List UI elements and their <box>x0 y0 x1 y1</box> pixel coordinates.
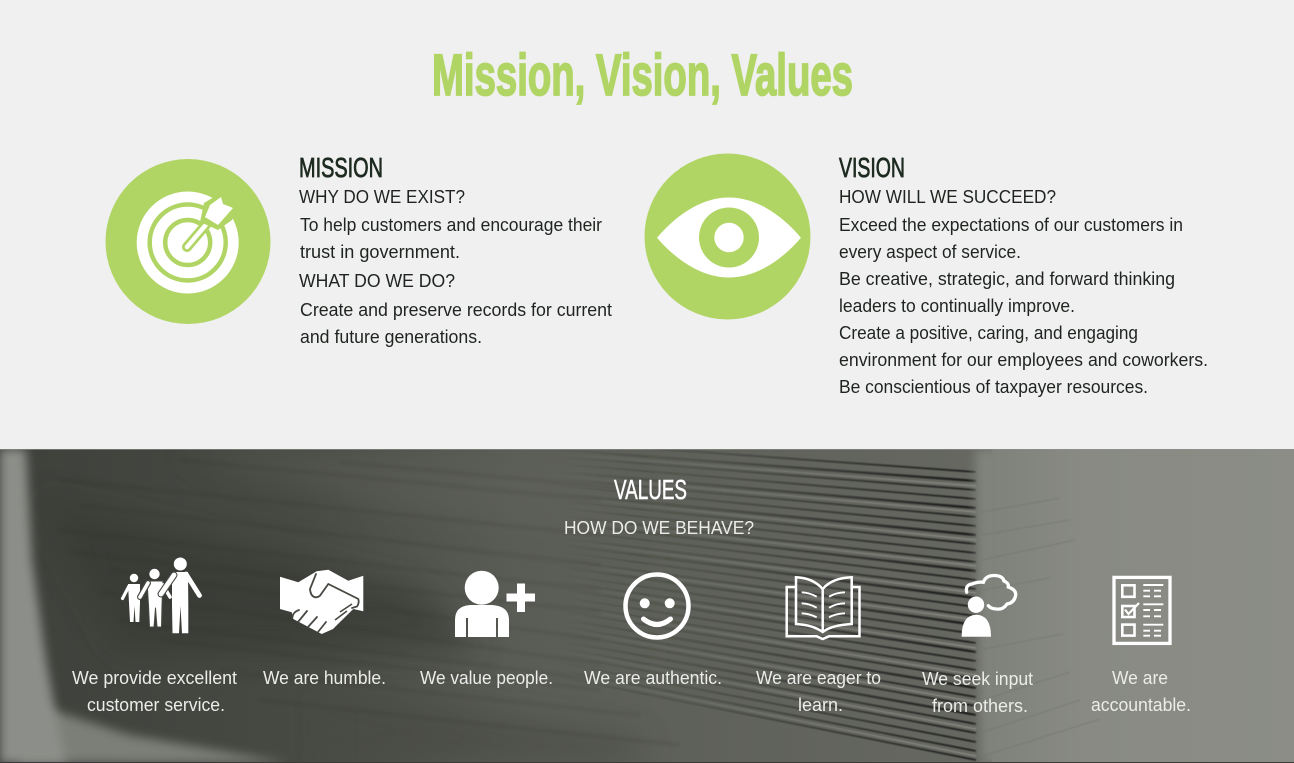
vision answers: environment for our employees and coworkers. <box>839 350 1208 370</box>
mission answer 2: Create and preserve records for current <box>300 300 612 320</box>
title: Mission, Vision, Values <box>432 43 853 108</box>
mission heading: MISSION <box>299 152 383 183</box>
vision question: HOW WILL WE SUCCEED? <box>839 187 1056 207</box>
vision answers: Create a positive, caring, and engaging <box>839 323 1138 343</box>
icon: family <box>122 558 200 633</box>
icon: person with plus <box>455 571 535 637</box>
mission answer 1: To help customers and encourage their <box>300 215 602 235</box>
icon: person thinking <box>962 575 1016 637</box>
mission question 1: WHY DO WE EXIST? <box>299 187 465 207</box>
icon: open book <box>787 577 860 639</box>
caption: seek input <box>922 669 1033 716</box>
caption: accountable: We are <box>1112 668 1168 688</box>
vision answers: every aspect of service. <box>839 242 1021 262</box>
icon: handshake <box>280 570 363 634</box>
caption: value people: We value people. <box>420 668 553 688</box>
vision answers: Be creative, strategic, and forward thinking <box>839 269 1175 289</box>
vision answers: Be conscientious of taxpayer resources. <box>839 377 1148 397</box>
vision answers <box>839 215 1208 397</box>
mission answer 1 <box>300 215 602 262</box>
caption: eager to learn: learn. <box>798 695 843 715</box>
caption: customer service: We provide excellent <box>72 668 237 688</box>
caption: accountable <box>1091 668 1191 715</box>
icon: vision eye <box>644 154 810 320</box>
caption: customer service: customer service. <box>87 695 225 715</box>
vision answers: leaders to continually improve. <box>839 296 1075 316</box>
icon: checklist <box>1114 577 1170 643</box>
caption: accountable: accountable. <box>1091 695 1191 715</box>
mission answer 2: and future generations. <box>300 327 482 347</box>
caption: seek input: We seek input <box>922 669 1033 689</box>
caption: eager to learn <box>756 668 881 715</box>
caption: customer service <box>72 668 237 715</box>
caption: humble: We are humble. <box>263 668 386 688</box>
vision text block <box>839 152 1208 397</box>
vision answers: Exceed the expectations of our customers in <box>839 215 1183 235</box>
mission answer 2 <box>300 300 612 347</box>
icon: smiley <box>626 574 688 638</box>
mission text block <box>299 152 612 347</box>
values subheading: HOW DO WE BEHAVE? <box>564 518 754 538</box>
mission question 2: WHAT DO WE DO? <box>299 271 455 291</box>
mission answer 1: trust in government. <box>300 242 460 262</box>
icon: mission target <box>106 159 270 324</box>
vision heading: VISION <box>839 152 905 183</box>
values background photo <box>0 442 1294 763</box>
soft streaks on the left of the stack <box>60 460 680 745</box>
caption: seek input: from others. <box>932 696 1028 716</box>
page background <box>0 0 1294 449</box>
caption: authentic: We are authentic. <box>584 668 722 688</box>
caption: eager to learn: We are eager to <box>756 668 881 688</box>
values heading: VALUES <box>614 474 687 505</box>
